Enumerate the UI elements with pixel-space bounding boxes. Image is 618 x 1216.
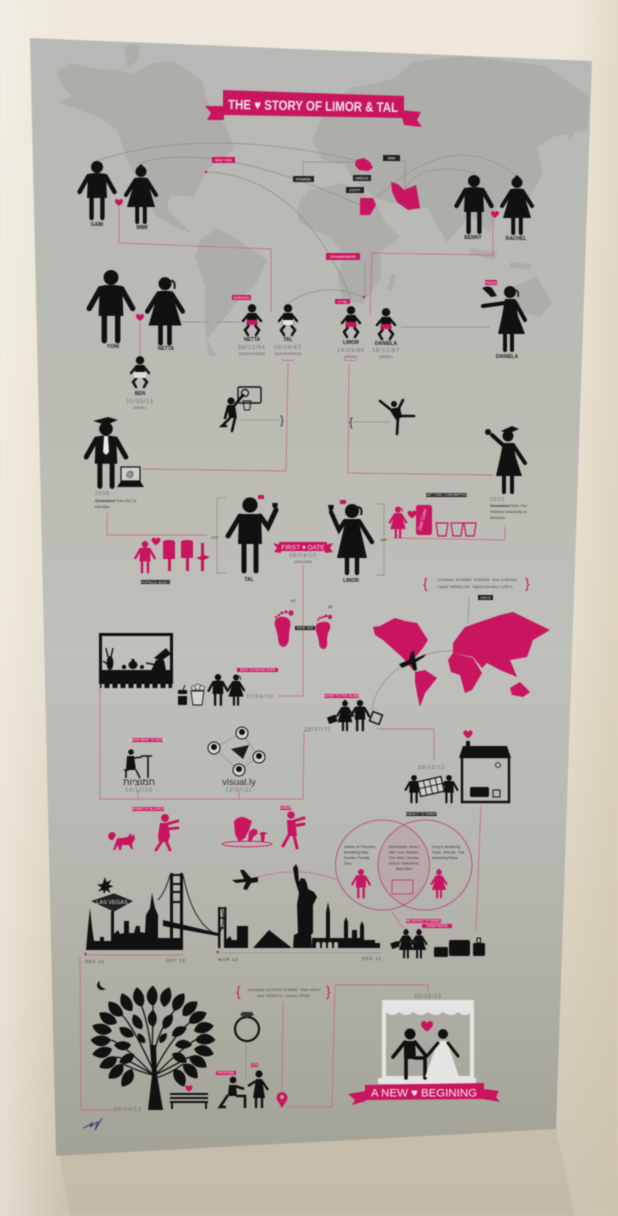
bride xyxy=(425,1029,459,1077)
label: Pirate: PIRATE xyxy=(485,281,497,285)
label: moving: MOVED TO THE ISLAND xyxy=(323,694,360,698)
label: Egypt: EGYPT xyxy=(350,188,360,192)
icon: popsicle full xyxy=(163,540,175,571)
text: Limor graduation xyxy=(490,497,528,520)
baby: Ben: BEN xyxy=(135,391,146,397)
text: wedding date: 20/08/13 xyxy=(414,994,442,1000)
buildings and base xyxy=(226,926,248,948)
text: Tal shows: Game of Thrones, xyxy=(344,844,376,849)
text: Tal graduation: Graduated from IDC in xyxy=(95,498,136,503)
icon: Limor dancing xyxy=(380,400,414,434)
sign: Las Vegas xyxy=(90,877,134,943)
person: Limor with wine xyxy=(328,504,372,584)
text: proposal location: } xyxy=(326,983,331,999)
text: Limor shows: Grey's Anatomy, xyxy=(432,844,461,849)
text: Tal shows: Guy xyxy=(344,860,351,866)
icon: heart xyxy=(152,538,160,545)
bracket: Limor hobby: { xyxy=(349,415,353,429)
silhouette: table and seats xyxy=(100,670,172,688)
text: Crete facts: } xyxy=(525,575,530,591)
person: Rachel: RACHEL xyxy=(506,236,526,242)
title banner: THE ♥ STORY OF LIMOR & TAL xyxy=(228,97,398,115)
text: Tal shows xyxy=(344,844,376,866)
baby: Limor: LIMOR xyxy=(343,340,359,346)
map: Australia xyxy=(505,277,552,317)
pink world map xyxy=(373,612,550,707)
map: Africa xyxy=(448,653,482,693)
label: I love Tal xyxy=(335,299,350,304)
baby: Limor: 24/09/85 xyxy=(337,348,365,354)
text: shared shows: Grey's rehedend, xyxy=(389,860,419,866)
ribbon: a new beginning: A NEW ♥ BEGINING xyxy=(371,1088,477,1100)
label: Greece: GREECE xyxy=(355,176,369,180)
icon: cat xyxy=(108,832,135,850)
person: Benny xyxy=(456,175,492,241)
ribbon: a new beginning xyxy=(348,1083,500,1105)
heart xyxy=(421,1021,433,1032)
icon: pink man xyxy=(352,869,370,898)
skyline: date labels: DEC 11 xyxy=(362,956,381,961)
person: Gabi xyxy=(80,161,114,228)
person: Mimi xyxy=(126,164,156,231)
text: Crete facts: Coordinate: 35.240862, 24.809149 Area: 8,336 km2 xyxy=(437,578,517,582)
icon: Limor foot: 38 xyxy=(328,604,333,609)
label: venn title: SUBJECT TO DEBATE xyxy=(405,812,438,816)
visual.ly network xyxy=(208,727,265,776)
labels: travel couple: HONEYMOON xyxy=(426,924,448,928)
text: date 08/04/13: 08/04/13 xyxy=(114,1107,142,1113)
text: Limor shows xyxy=(432,844,465,860)
icon: Tal foot: 43 xyxy=(291,598,296,603)
icon: plane over map xyxy=(399,651,426,671)
label: diet coke consumption: DIET COKE CONSUMPTION xyxy=(426,493,468,497)
text: proposal location: Area: HERZLIYA Country: ISRAEL xyxy=(256,994,311,998)
skyline: date labels: MAR 12 xyxy=(218,957,238,962)
labels: travel couple xyxy=(406,919,452,928)
icon: laptop xyxy=(117,467,144,487)
text: Limor shows: Suits, Weeds, The xyxy=(432,850,465,854)
icon: couple holding hands xyxy=(209,674,244,705)
person: Limor with wine: LIMOR xyxy=(343,578,359,584)
label: Crete xyxy=(478,595,493,600)
sign: Las Vegas: LAS VEGAS xyxy=(96,900,128,906)
silhouette: rabbit xyxy=(103,648,113,670)
person: Tal with wine: TAL xyxy=(244,577,254,583)
icon: proposal couple xyxy=(220,1070,268,1108)
ribbon: first date: FIRST ♥ DATE xyxy=(281,544,325,552)
person: Netta xyxy=(147,277,183,352)
person: Daniela with parrot: DANIELA xyxy=(496,354,518,360)
icon: travelling couple xyxy=(327,700,382,730)
icon: carrying sofa xyxy=(406,775,457,802)
group: Tal zombie xyxy=(222,811,304,848)
text: Limor graduation: 2010 xyxy=(490,497,505,503)
text: proposal location: Coordinate: 32.165521,34.80892 Place: Bench xyxy=(248,988,320,992)
baby: Tal: 09/09/82 xyxy=(274,345,302,351)
label: Iran: IRAN xyxy=(388,156,396,160)
text: Limor graduation: Graduated from The xyxy=(490,503,528,508)
text: shared shows: Homeland, How I xyxy=(389,844,419,849)
migration arcs xyxy=(93,143,518,327)
icon: popsicle stick xyxy=(196,543,210,571)
icon: Limor at work xyxy=(124,749,152,778)
text: Tal shows: Dexter, Family xyxy=(344,855,370,860)
group: Tal popsicle addict xyxy=(135,538,210,572)
baby: Tal xyxy=(274,304,302,356)
map: islands xyxy=(387,120,576,291)
baby: Ben xyxy=(126,356,154,410)
baby: Daniela xyxy=(372,308,400,359)
bracket: Tal hobby: } xyxy=(280,413,284,427)
baby: Daniela: (ISRAEL) xyxy=(379,355,393,359)
label: yes: YES xyxy=(251,1063,258,1067)
heart: bench xyxy=(185,1085,193,1092)
person: Rachel xyxy=(502,176,532,242)
grey thin connectors xyxy=(217,420,469,1080)
text: Limor graduation: Rehovot xyxy=(490,515,506,520)
icon: pink girl xyxy=(390,507,406,537)
icon: ring xyxy=(235,1012,259,1041)
map: Eurasia xyxy=(453,612,550,677)
skyline: date labels xyxy=(85,956,381,964)
icon: pink woman xyxy=(432,869,446,898)
map: South America xyxy=(195,228,267,357)
icon: zombie man xyxy=(283,811,304,848)
map: Australia xyxy=(510,682,530,697)
text: shared shows: Met Your Mother, xyxy=(389,850,419,854)
icon: zombie woman xyxy=(156,814,178,850)
baby: Netta: NETTA xyxy=(244,337,261,343)
baby: Ben: (ISRAEL) xyxy=(133,406,147,410)
text: shared shows: Mad Men xyxy=(396,866,412,871)
canvas shadow on wall xyxy=(60,1129,575,1216)
logo: Hebrew wordmark: חמוציות xyxy=(123,777,155,788)
heart: Benny and Rachel xyxy=(491,211,499,218)
person: graduate Limor xyxy=(485,426,525,492)
silhouette: mad hatter xyxy=(146,648,171,675)
label: Romania xyxy=(293,176,314,182)
text: Tal graduation xyxy=(95,491,136,509)
map: South America xyxy=(415,670,437,707)
Golden Gate bridge xyxy=(158,873,226,948)
label: sensitive: AFRAID OF ALLERGY xyxy=(132,807,165,811)
label: Greece xyxy=(353,175,371,181)
city right side xyxy=(312,902,380,948)
map: Africa xyxy=(297,183,400,303)
map: Eurasia xyxy=(312,56,590,243)
person: Gabi: GABI xyxy=(91,222,104,228)
icon: popsicle half xyxy=(181,540,193,571)
label: New York: NEW YORK xyxy=(215,158,233,162)
label: New York xyxy=(212,157,235,163)
Statue of Liberty xyxy=(293,864,317,948)
labels: travel couple: WE MOVED TO ISRAEL xyxy=(406,919,441,923)
label: Johannesburg: JOHANNESBURG xyxy=(330,255,357,259)
tree xyxy=(91,986,215,1110)
group: Limor diet coke xyxy=(390,505,476,537)
baby: Netta: 08/12/84 xyxy=(238,345,266,351)
groom xyxy=(393,1028,426,1078)
venn diagram: TV series xyxy=(336,820,472,910)
place labels xyxy=(205,155,497,304)
label: best 3D movie: BEST 3-D MOVIE EVER xyxy=(240,668,276,672)
text: Tal graduation: Herzliya xyxy=(95,504,110,509)
baby: Daniela: DANIELA xyxy=(375,341,397,347)
text: shared shows xyxy=(388,844,420,871)
baby: Limor: (ISRAEL) xyxy=(344,355,358,359)
curtain scallops xyxy=(384,1002,472,1015)
label: Iran xyxy=(383,155,400,161)
map highlight: Iran xyxy=(391,182,420,210)
icon: Tal foot xyxy=(275,598,296,647)
signature xyxy=(83,1118,102,1130)
heart: Gabi and Mimi xyxy=(115,199,123,206)
baby: Tal: TAL xyxy=(283,337,293,343)
title banner xyxy=(205,90,422,127)
icon: laptop: @ xyxy=(126,470,134,479)
map: Greenland xyxy=(124,44,140,68)
text: date 11/04/10: 11/04/10 xyxy=(246,694,274,700)
label: Limor age xyxy=(340,500,346,504)
person: graduate Tal xyxy=(86,417,126,486)
label: popsicle addict: POPSICLE ADDICT xyxy=(141,580,170,584)
icon: couple with luggage xyxy=(390,929,485,958)
buildings xyxy=(86,893,183,950)
label: Johannesburg xyxy=(326,253,360,260)
map: North America xyxy=(373,618,428,670)
text: Crete facts: Capital: HERAKLION Highest Elevation: 2,456 m xyxy=(437,585,513,589)
baby: Tal: (SOUTH AFRICA) xyxy=(275,352,301,356)
icon: cinema screen xyxy=(100,634,172,688)
text: first date details xyxy=(289,553,317,564)
person: Yoni xyxy=(89,270,133,350)
logo: visual.ly: visual.ly xyxy=(222,777,256,788)
person: Benny: BENNY xyxy=(464,235,482,241)
heart above house xyxy=(463,730,473,738)
dot: New York xyxy=(205,171,207,173)
baby: Netta: (SOUTH AFRICA) xyxy=(239,352,265,356)
label: Survived xyxy=(232,295,251,300)
text: proposal location: { xyxy=(236,983,241,999)
text: Limor height: 160" xyxy=(380,537,389,542)
icon: three glasses xyxy=(436,523,476,536)
grey world map xyxy=(57,44,590,357)
arches xyxy=(316,942,338,948)
dot: Johannesburg xyxy=(363,296,365,298)
text: date 28/07/11: 28/07/11 xyxy=(304,727,332,733)
silhouette: tea set xyxy=(122,659,144,669)
text: Tal shows: Breaking Bad, xyxy=(344,850,369,854)
text: proposal location xyxy=(236,983,331,999)
map: North America xyxy=(57,60,233,233)
label: shoe size: SHOE SIZE xyxy=(296,626,314,630)
icon: soda can: Diet Coke xyxy=(417,508,429,531)
wedding frame xyxy=(378,1002,476,1084)
person: Tal with wine xyxy=(228,497,278,583)
markers on timeline xyxy=(84,951,219,956)
skyline: Las Vegas and San Francisco xyxy=(86,864,380,950)
text: shared shows: The Wire, House, xyxy=(388,855,420,860)
icon: moon xyxy=(97,981,106,990)
text: Crete facts: { xyxy=(423,575,428,591)
text: Limor shows: Amazing Race xyxy=(432,855,459,860)
person: Netta: NETTA xyxy=(158,346,175,352)
text: first date details: (INGA BAR) xyxy=(294,560,312,564)
label: Crete: CRETE xyxy=(480,596,491,600)
pink family lines xyxy=(80,207,505,1110)
icon: heart xyxy=(408,511,416,518)
person: Yoni: YONI xyxy=(107,344,120,350)
text: Tal height: 172" xyxy=(211,535,220,540)
map highlight: Romania xyxy=(355,158,373,171)
text: date 13/07/11: 13/07/11 xyxy=(225,788,253,794)
label: Tal age xyxy=(258,495,264,499)
icon: location pin xyxy=(276,1092,288,1108)
label: startup job: LIMOR WENT TO WORK xyxy=(129,738,167,742)
ribbon: first date xyxy=(273,542,333,553)
text: first date details: 08/04/10 xyxy=(289,553,317,559)
group: Limor zombie xyxy=(108,814,178,850)
label: hungry: HUNGRY xyxy=(279,806,293,810)
icon: pink boy xyxy=(135,541,155,572)
text: Tal graduation: 2006 xyxy=(95,491,110,497)
icon: plane xyxy=(232,870,258,890)
baby: Ben: 31/03/13 xyxy=(126,399,154,405)
icon: Tal basketball xyxy=(222,387,261,431)
baby: Netta xyxy=(238,304,266,356)
person: Mimi: MIMI xyxy=(136,225,148,231)
label: proposal: PROPOSAL xyxy=(217,1071,235,1075)
text: Crete facts xyxy=(423,575,530,591)
skyline: date labels: DEC 12 xyxy=(85,959,105,964)
text: Limor graduation: Hebrew University in xyxy=(490,509,527,514)
text: date 10/12/10: 10/12/10 xyxy=(125,788,153,794)
icon: Limor foot xyxy=(316,604,333,649)
heart: Yoni and Netta xyxy=(136,314,144,321)
icon: food plate xyxy=(222,817,272,847)
label: Romania: ROMANIA xyxy=(296,178,312,182)
skyline: date labels: OCT 12 xyxy=(166,958,186,963)
icon: house xyxy=(459,730,511,802)
icon: bench xyxy=(170,1093,208,1109)
text: date 08/10/11: 08/10/11 xyxy=(418,765,446,771)
label: Egypt xyxy=(346,187,364,193)
icon: soda and popcorn xyxy=(177,684,204,705)
label: I love Tal: I ♥ TAL xyxy=(337,300,348,304)
map highlight: Egypt xyxy=(360,198,376,215)
baby: Limor xyxy=(337,306,365,359)
person: Daniela with parrot xyxy=(482,286,525,360)
icon: TV xyxy=(392,880,413,894)
baby: Daniela: 18/12/87 xyxy=(372,348,400,354)
label: Survived: SURVIVED xyxy=(233,296,250,300)
